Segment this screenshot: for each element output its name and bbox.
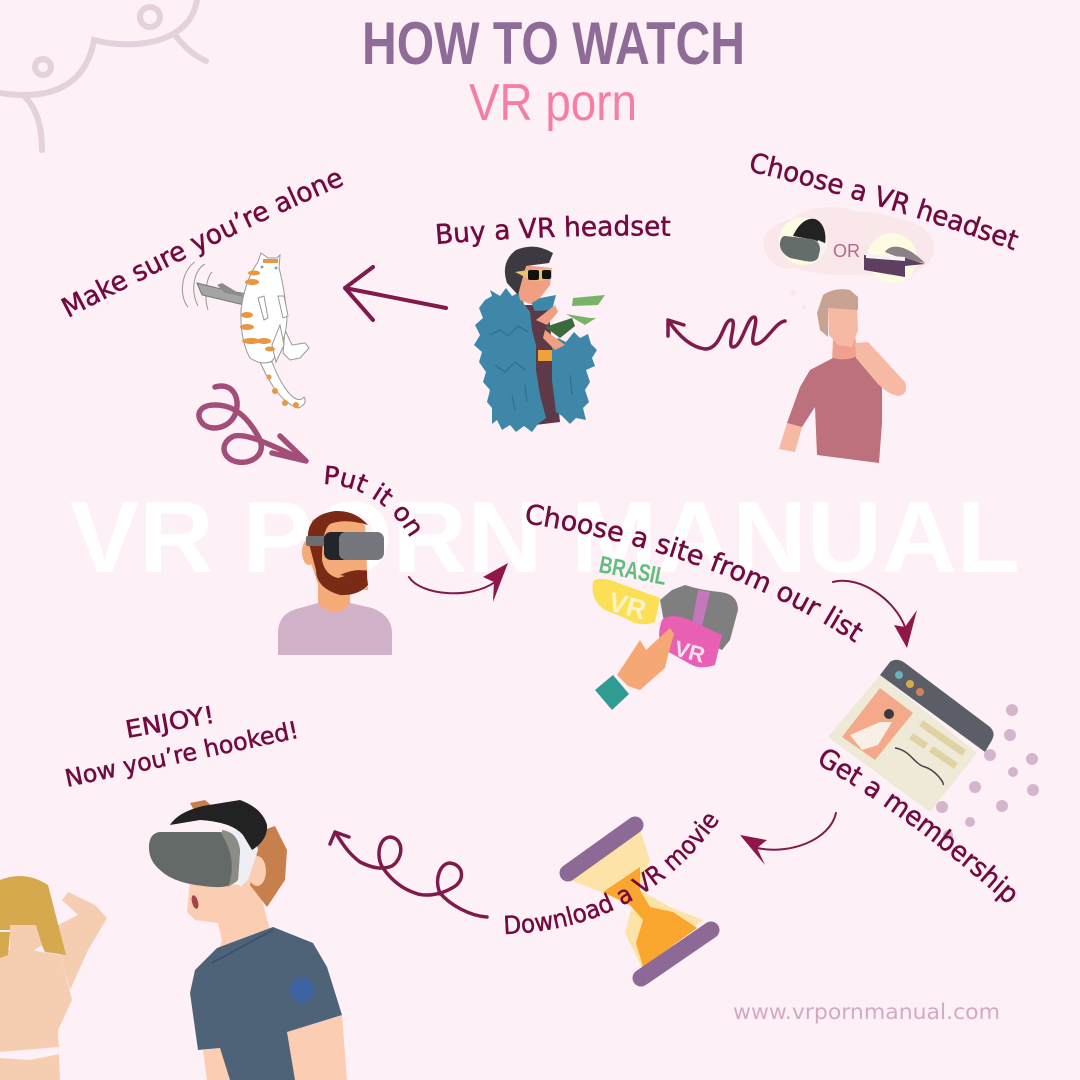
figure: thinking man <box>779 289 906 463</box>
icon: right headset <box>864 247 925 277</box>
label: enjoy: ENJOY! <box>123 701 217 744</box>
figure: man in fur coat <box>474 247 605 432</box>
title: HOW TO WATCH <box>362 10 745 77</box>
motion lines <box>182 262 212 310</box>
step: put it on <box>278 465 420 655</box>
arrow: to membership <box>833 581 917 648</box>
illustration: site logos and hand: VR <box>605 587 649 626</box>
label: download a VR movie: Download a VR movie <box>504 814 719 934</box>
arrow: from put it on to site <box>409 563 508 602</box>
step: choose a VR headset <box>750 153 1019 463</box>
illustration: site logos and hand: VR <box>672 636 708 668</box>
step: get a membership <box>820 660 1039 902</box>
label: get a membership: Get a membership <box>820 749 1016 902</box>
arrow: long arrow to cat <box>345 267 446 320</box>
title <box>362 10 745 132</box>
arrow: spring from thinking man to buy <box>668 317 785 349</box>
text: OR: OR <box>833 241 860 261</box>
illustration: site logos and hand <box>592 551 738 710</box>
step: buy a VR headset <box>436 214 670 432</box>
arrow: spring to enjoy <box>330 832 487 917</box>
illustration: cat being pushed <box>182 253 309 408</box>
label: make sure you're alone: Make sure you’re alone <box>60 172 344 318</box>
figure: man with headset looking down <box>149 800 347 1080</box>
website url: www.vrpornmanual.com <box>733 1000 1000 1024</box>
figure: blonde woman <box>0 876 107 1080</box>
title: VR porn <box>469 74 637 132</box>
label: choose a VR headset: Choose a VR headset <box>750 153 1019 250</box>
thought cloud <box>763 207 934 309</box>
arrow: loop from cat to put it on <box>199 386 306 462</box>
watermark: VR PORN MANUAL <box>70 482 1020 594</box>
figure: man with headset <box>278 511 392 655</box>
icon: left headset <box>780 219 827 262</box>
decorative corner lines <box>0 0 206 150</box>
label: put it on: Put it on <box>325 465 420 537</box>
arrow: to download <box>740 813 836 865</box>
step: make sure you're alone <box>60 172 344 408</box>
label: enjoy: Now you’re hooked! <box>62 716 301 793</box>
illustration: browser window <box>828 660 994 812</box>
illustration: hourglass <box>568 825 711 978</box>
illustration: site logos and hand: BRASIL <box>597 551 669 591</box>
label: choose a site from our list: Choose a site from our list <box>526 504 863 643</box>
label: buy a VR headset: Buy a VR headset <box>436 214 670 248</box>
step: choose a site <box>526 504 863 710</box>
decoration: dots <box>936 704 1039 840</box>
